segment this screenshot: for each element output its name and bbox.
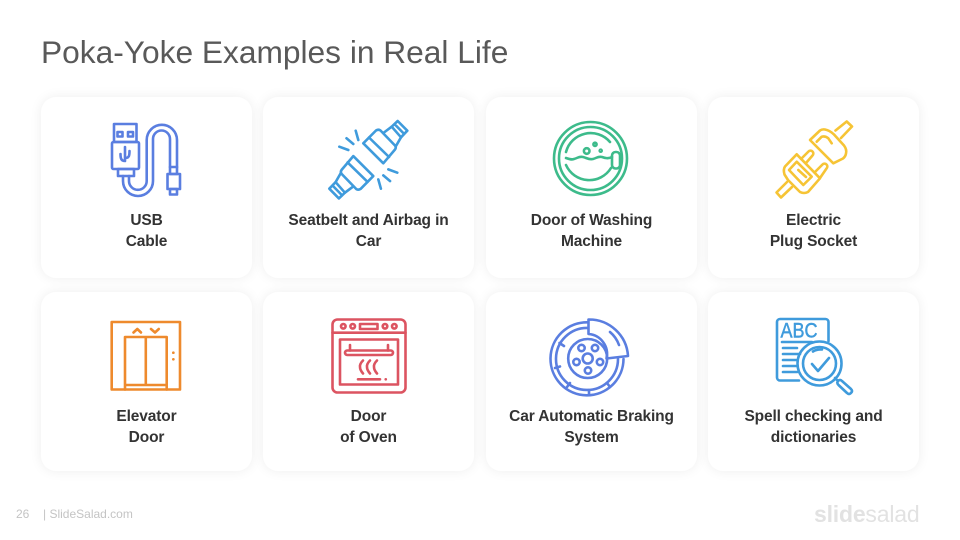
label: seatbelt and airbag: Car [356, 233, 381, 250]
text: ABC: ABC [780, 320, 818, 342]
icon: spell check magnifier [776, 318, 854, 396]
label: washing machine door: Door of Washing [531, 212, 652, 229]
label: electric plug socket [770, 212, 858, 250]
label: oven door: Door [351, 408, 386, 425]
label: spell checking and dictionaries [744, 408, 883, 446]
panel: seatbelt and airbag [263, 97, 474, 278]
label: oven door: of Oven [340, 429, 397, 446]
title: Poka-Yoke Examples in Real Life [41, 34, 508, 70]
label: washing machine door: Machine [561, 233, 622, 250]
label: spell checking and dictionaries: dictionaries [771, 429, 856, 446]
panel: car automatic braking system [486, 292, 697, 471]
label: USB cable: USB [130, 212, 163, 229]
icon: brake disc [549, 318, 630, 397]
page number: 26 [16, 507, 29, 521]
label: car automatic braking system: System [564, 429, 619, 446]
logo: slidesalad: slidesalad [814, 501, 919, 527]
panel: washing machine door [486, 97, 697, 278]
label: car automatic braking system [509, 408, 674, 446]
icon: seatbelt [328, 120, 409, 200]
label: USB cable: Cable [126, 233, 167, 250]
label: spell checking and dictionaries: Spell checking and [744, 408, 883, 425]
label: electric plug socket: Electric [786, 212, 841, 229]
label: elevator door [116, 408, 177, 446]
panel: spell checking and dictionaries [708, 292, 919, 471]
label: washing machine door [531, 212, 652, 250]
panel: elevator door [41, 292, 252, 471]
label: elevator door: Door [129, 429, 164, 446]
panel: USB cable [41, 97, 252, 278]
icon: electric plug [775, 120, 854, 199]
panel: electric plug socket [708, 97, 919, 278]
icon: USB cable [110, 122, 182, 198]
icon: oven [331, 318, 407, 394]
icon: washing machine door [552, 120, 628, 196]
label: seatbelt and airbag: Seatbelt and Airbag in [288, 212, 449, 229]
label: seatbelt and airbag [288, 212, 449, 250]
icon: elevator [110, 320, 182, 391]
footer site name: | SlideSalad.com [43, 507, 133, 521]
label: electric plug socket: Plug Socket [770, 233, 857, 250]
label: oven door [340, 408, 397, 446]
label: USB cable [126, 212, 167, 250]
label: car automatic braking system: Car Automatic Braking [509, 408, 674, 425]
panel: oven door [263, 292, 474, 471]
label: elevator door: Elevator [116, 408, 177, 425]
